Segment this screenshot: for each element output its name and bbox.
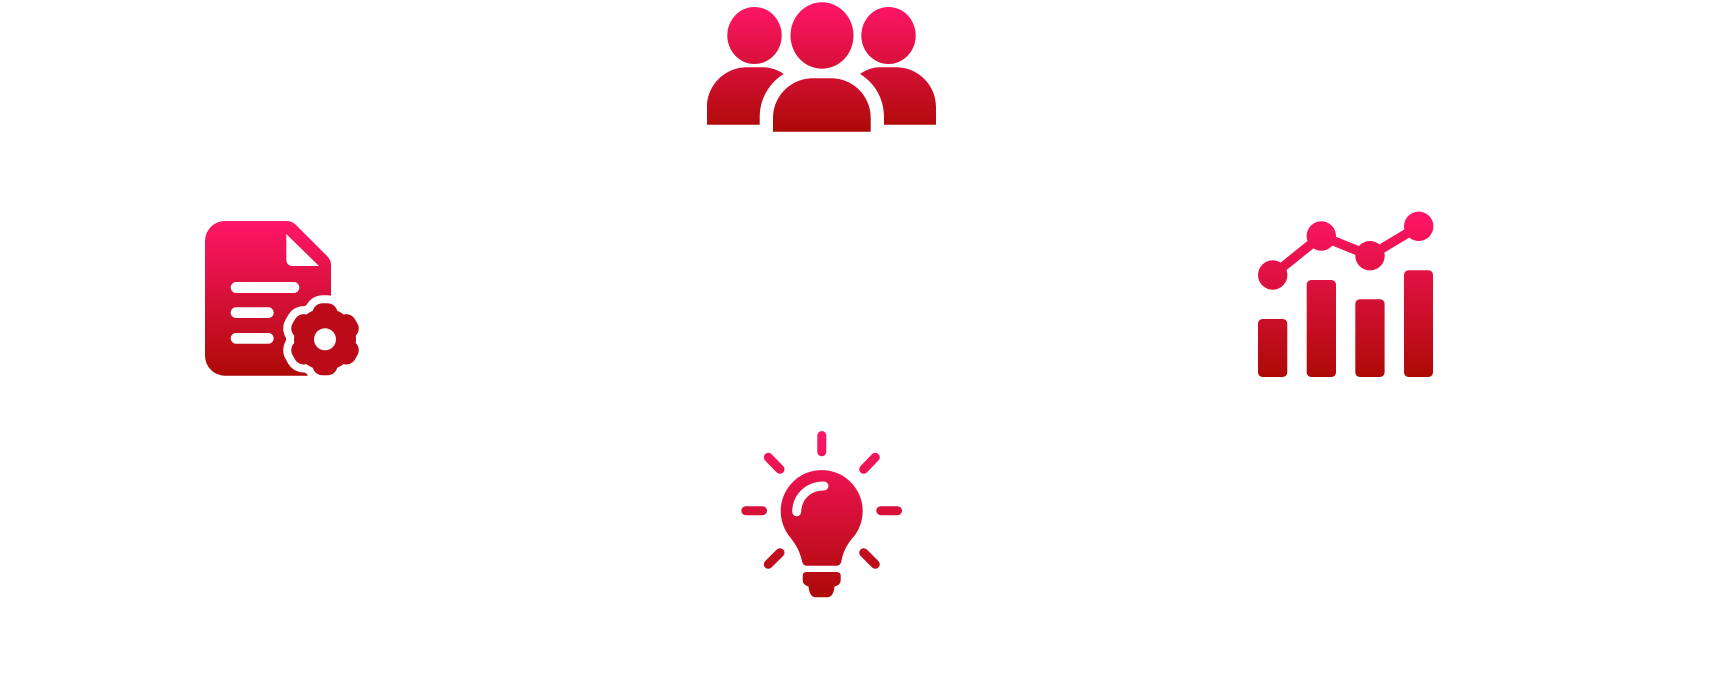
bulb rays	[746, 436, 898, 564]
bulb highlight	[797, 486, 824, 512]
bulb base	[803, 572, 841, 597]
document body	[205, 221, 331, 376]
icon: people group	[707, 2, 936, 132]
bulb glass	[781, 470, 863, 566]
bars	[1258, 270, 1433, 377]
document text lines	[231, 282, 299, 344]
trend line	[1273, 226, 1419, 275]
icon: document with gear	[205, 221, 362, 376]
gear	[288, 303, 362, 375]
icon: bar chart with trend line	[1258, 212, 1433, 377]
icon: light bulb	[746, 436, 898, 597]
trend points	[1258, 212, 1433, 290]
gear hole	[314, 328, 336, 350]
gear white outline	[288, 303, 362, 375]
document fold	[286, 234, 319, 266]
